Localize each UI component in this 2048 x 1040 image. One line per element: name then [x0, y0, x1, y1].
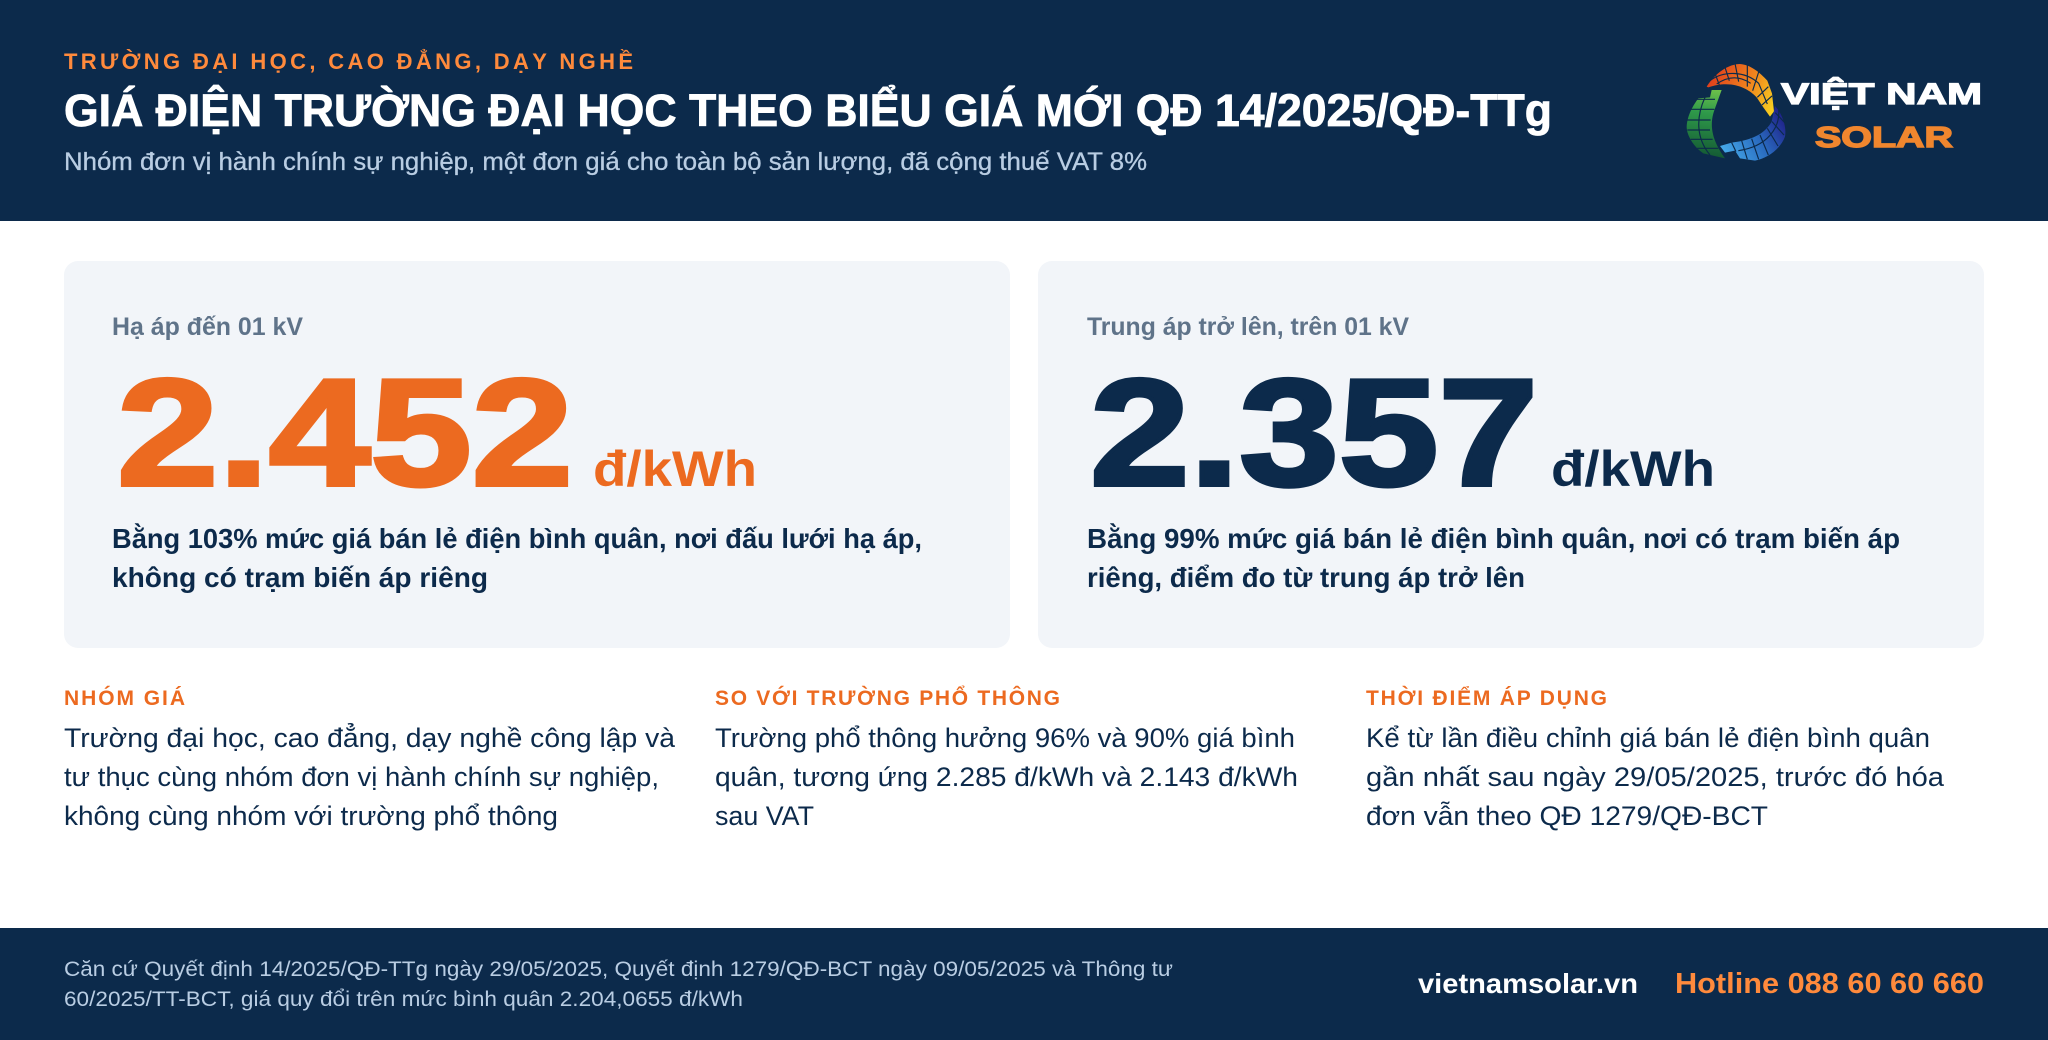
- hotline: Hotline 088 60 60 660: [1675, 968, 1984, 1000]
- title: GIÁ ĐIỆN TRƯỜNG ĐẠI HỌC THEO BIỂU GIÁ MỚI QĐ 14/2025/QĐ-TTg: [64, 85, 1552, 136]
- note: compared with schools: [715, 686, 1298, 831]
- note body: gần nhất sau ngày 29/05/2025, trước đó hóa: [1366, 762, 1945, 792]
- note: effective date: [1366, 686, 1945, 831]
- note body: đơn vẫn theo QĐ 1279/QĐ-BCT: [1366, 800, 1768, 831]
- medium voltage description: Bằng 99% mức giá bán lẻ điện bình quân, nơi có trạm biến áp: [1087, 523, 1900, 554]
- header band: [0, 0, 2048, 221]
- note body: sau VAT: [715, 801, 814, 831]
- logo mark: mosaic ring: [1687, 63, 1785, 161]
- low voltage description: [112, 523, 922, 593]
- note body: [64, 721, 676, 831]
- note body: [1366, 723, 1945, 831]
- note heading: THỜI ĐIỂM ÁP DỤNG: [1366, 686, 1607, 710]
- note body: quân, tương ứng 2.285 đ/kWh và 2.143 đ/kWh: [715, 762, 1298, 792]
- note body: tư thục cùng nhóm đơn vị hành chính sự nghiệp,: [64, 762, 659, 792]
- medium voltage label: Trung áp trở lên, trên 01 kV: [1087, 313, 1409, 341]
- logo wordmark bottom: SOLAR: [1815, 122, 1953, 154]
- note body: Kể từ lần điều chỉnh giá bán lẻ điện bình quân: [1366, 723, 1930, 753]
- logo wordmark top: VIỆT NAM: [1781, 77, 1982, 111]
- low voltage description: không có trạm biến áp riêng: [112, 562, 488, 593]
- note heading: SO VỚI TRƯỜNG PHỔ THÔNG: [715, 686, 1060, 710]
- footer band: [0, 928, 2048, 1040]
- medium voltage price: 2.357: [1090, 348, 1538, 518]
- note body: [715, 723, 1298, 831]
- note body: Trường phổ thông hưởng 96% và 90% giá bình: [715, 723, 1295, 753]
- panel: low voltage: [64, 261, 1010, 648]
- note body: Trường đại học, cao đẳng, dạy nghề công lập và: [64, 721, 676, 753]
- medium voltage description: [1087, 523, 1900, 593]
- note body: không cùng nhóm với trường phổ thông: [64, 801, 558, 831]
- note: price group: [64, 686, 676, 831]
- low voltage price: 2.452: [117, 348, 573, 518]
- medium voltage description: riêng, điểm đo từ trung áp trở lên: [1087, 562, 1525, 593]
- source note: [64, 958, 1173, 1011]
- low voltage description: Bằng 103% mức giá bán lẻ điện bình quân, nơi đấu lưới hạ áp,: [112, 523, 922, 554]
- website: vietnamsolar.vn: [1418, 968, 1638, 999]
- logo: Việt Nam Solar: [1687, 63, 1982, 161]
- subtitle: Nhóm đơn vị hành chính sự nghiệp, một đơn giá cho toàn bộ sản lượng, đã cộng thuế VAT 8%: [64, 148, 1147, 176]
- source note: Căn cứ Quyết định 14/2025/QĐ-TTg ngày 29/05/2025, Quyết định 1279/QĐ-BCT ngày 09/05/2025 và Thông tư: [64, 958, 1173, 981]
- panel: medium voltage: [1038, 261, 1984, 648]
- medium voltage unit: đ/kWh: [1551, 441, 1715, 497]
- note heading: NHÓM GIÁ: [64, 686, 185, 710]
- low voltage unit: đ/kWh: [593, 441, 757, 497]
- low voltage label: Hạ áp đến 01 kV: [112, 313, 303, 341]
- eyebrow: TRƯỜNG ĐẠI HỌC, CAO ĐẲNG, DẠY NGHỀ: [64, 49, 633, 74]
- source note: 60/2025/TT-BCT, giá quy đổi trên mức bình quân 2.204,0655 đ/kWh: [64, 988, 743, 1011]
